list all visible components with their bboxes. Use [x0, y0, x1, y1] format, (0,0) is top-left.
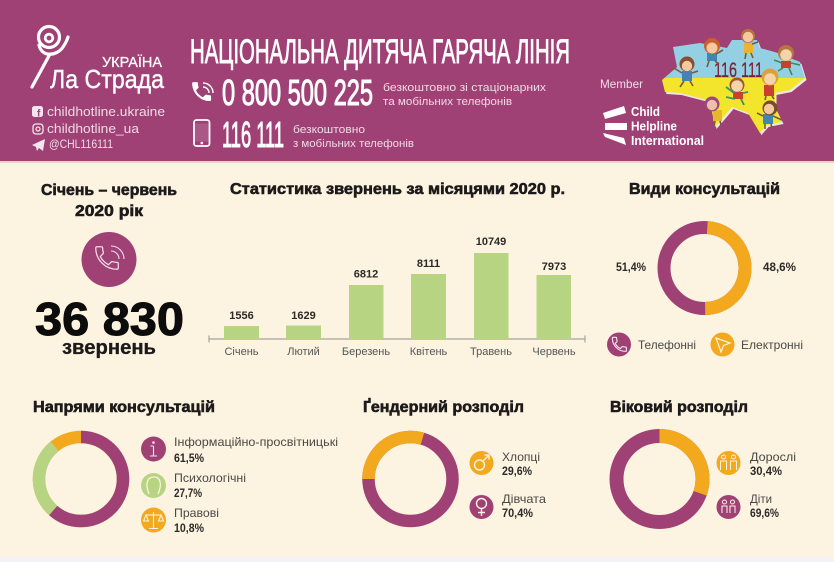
child 7 [704, 96, 722, 126]
legend: legal: Правові [174, 506, 219, 520]
heading: period [41, 182, 177, 220]
logo: Child Helpline International: Helpline [631, 120, 677, 134]
logo: La Strada: УКРАЇНА [102, 54, 162, 71]
legend: girls: 70,4% [502, 508, 533, 520]
legend: legal: 10,8% [174, 523, 204, 535]
legend: boys [470, 450, 540, 478]
donut: gender [368, 437, 452, 521]
legend: phone [607, 332, 696, 356]
bar: April: 8111 [417, 258, 440, 270]
panel: consultation types [607, 181, 803, 356]
social links: f [37, 108, 41, 120]
bar: January [224, 310, 259, 358]
value: electronic share: 48,6% [763, 262, 796, 274]
value: phone share: 51,4% [616, 262, 646, 274]
logo: La Strada [32, 26, 164, 94]
bar: March: Березень [342, 346, 390, 358]
social links: @CHL116111 [49, 137, 113, 151]
icon: phone in circle [82, 232, 136, 287]
legend: children: Діти [750, 492, 772, 506]
legend: adults: Дорослі [750, 450, 796, 464]
logo: Child Helpline International: International [631, 134, 704, 148]
panel: gender distribution [363, 397, 546, 521]
heading: consultation directions: Напрями консультацій [33, 399, 215, 416]
heading: age distribution: Віковий розподіл [610, 399, 748, 416]
donut: age [616, 436, 702, 522]
child 3 [741, 29, 758, 59]
logo: La Strada: Ла Страда [50, 64, 164, 94]
legend: children: 69,6% [750, 508, 779, 520]
donut: consultation directions [39, 437, 123, 521]
legend: adults [716, 450, 796, 478]
bar: June: Червень [532, 346, 576, 358]
legend: legal [141, 506, 219, 535]
heading: period: Січень – червень [41, 182, 177, 199]
legend: girls: Дівчата [502, 492, 546, 506]
child 2 [704, 38, 723, 67]
hotline number: та мобільних телефонів [383, 96, 512, 108]
panel: total calls [35, 182, 184, 359]
hotline number: 0 800 500 225 [222, 72, 373, 113]
member label: Member [600, 77, 643, 91]
legend: electronic: Електронні [741, 338, 803, 352]
legend: boys: 29,6% [502, 466, 532, 478]
child 8 [757, 100, 782, 129]
child 5 [762, 68, 778, 100]
legend: psychological: 27,7% [174, 488, 202, 500]
legend: informational: 61,5% [174, 453, 204, 465]
heading: gender distribution: Ґендерний розподіл [363, 397, 524, 416]
hotline number: безкоштовно зі стаціонарних [383, 82, 547, 94]
bar: March [342, 268, 390, 358]
bar: February [286, 310, 321, 358]
short number 116 111: з мобільних телефонів [293, 138, 414, 150]
bar: May: 10749 [476, 236, 506, 248]
bar: May: Травень [470, 346, 512, 358]
map of Ukraine with children [662, 29, 806, 135]
short number 116 111: безкоштовно [293, 124, 365, 136]
legend: informational: Інформаційно-просвітницькі [174, 435, 338, 449]
heading: period: 2020 рік [75, 203, 144, 220]
social links: childhotline.ukraine [47, 104, 165, 119]
bar: June [532, 261, 576, 358]
bar: April [410, 258, 448, 358]
bar: May [470, 236, 512, 358]
panel: consultation directions [33, 399, 338, 535]
heading: consultation types: Види консультацій [629, 181, 780, 198]
legend: girls [470, 492, 546, 520]
bar: June: 7973 [542, 261, 566, 273]
legend: psychological: Психологічні [174, 471, 246, 485]
legend: psychological [141, 471, 246, 500]
bar: March: 6812 [354, 268, 378, 280]
bar: January: 1556 [229, 310, 254, 322]
bar chart [209, 236, 585, 358]
legend: electronic [710, 332, 803, 356]
short number 116 111 [194, 114, 414, 155]
legend: adults: 30,4% [750, 466, 782, 478]
legend: children [716, 492, 779, 520]
short number 116 111: 116 111 [222, 114, 284, 155]
hotline number [192, 72, 547, 113]
panel: monthly statistics [209, 181, 585, 358]
total caption: звернень [62, 337, 156, 359]
social links [32, 104, 165, 151]
panel: age distribution [610, 399, 796, 522]
map number: 116 111 [714, 59, 763, 82]
legend: informational [141, 435, 338, 465]
donut: consultation types [661, 225, 748, 311]
heading: monthly statistics: Статистика звернень за місяцями 2020 р. [230, 181, 565, 198]
total number: 36 830 [35, 293, 184, 345]
bar: April: Квітень [410, 346, 448, 358]
panel: header banner [0, 0, 834, 163]
logo: Child Helpline International [603, 105, 704, 148]
bar: January: Січень [224, 346, 259, 358]
logo: Child Helpline International: Child [631, 105, 660, 119]
bar: February: 1629 [291, 310, 316, 322]
legend: phone: Телефонні [638, 338, 696, 352]
child 1 [674, 56, 698, 87]
title: НАЦІОНАЛЬНА ДИТЯЧА ГАРЯЧА ЛІНІЯ [190, 33, 570, 71]
bar: February: Лютий [287, 346, 320, 358]
social links: childhotline_ua [47, 121, 140, 136]
child 6 [726, 78, 748, 105]
legend: boys: Хлопці [502, 450, 540, 464]
child 4 [774, 45, 800, 75]
